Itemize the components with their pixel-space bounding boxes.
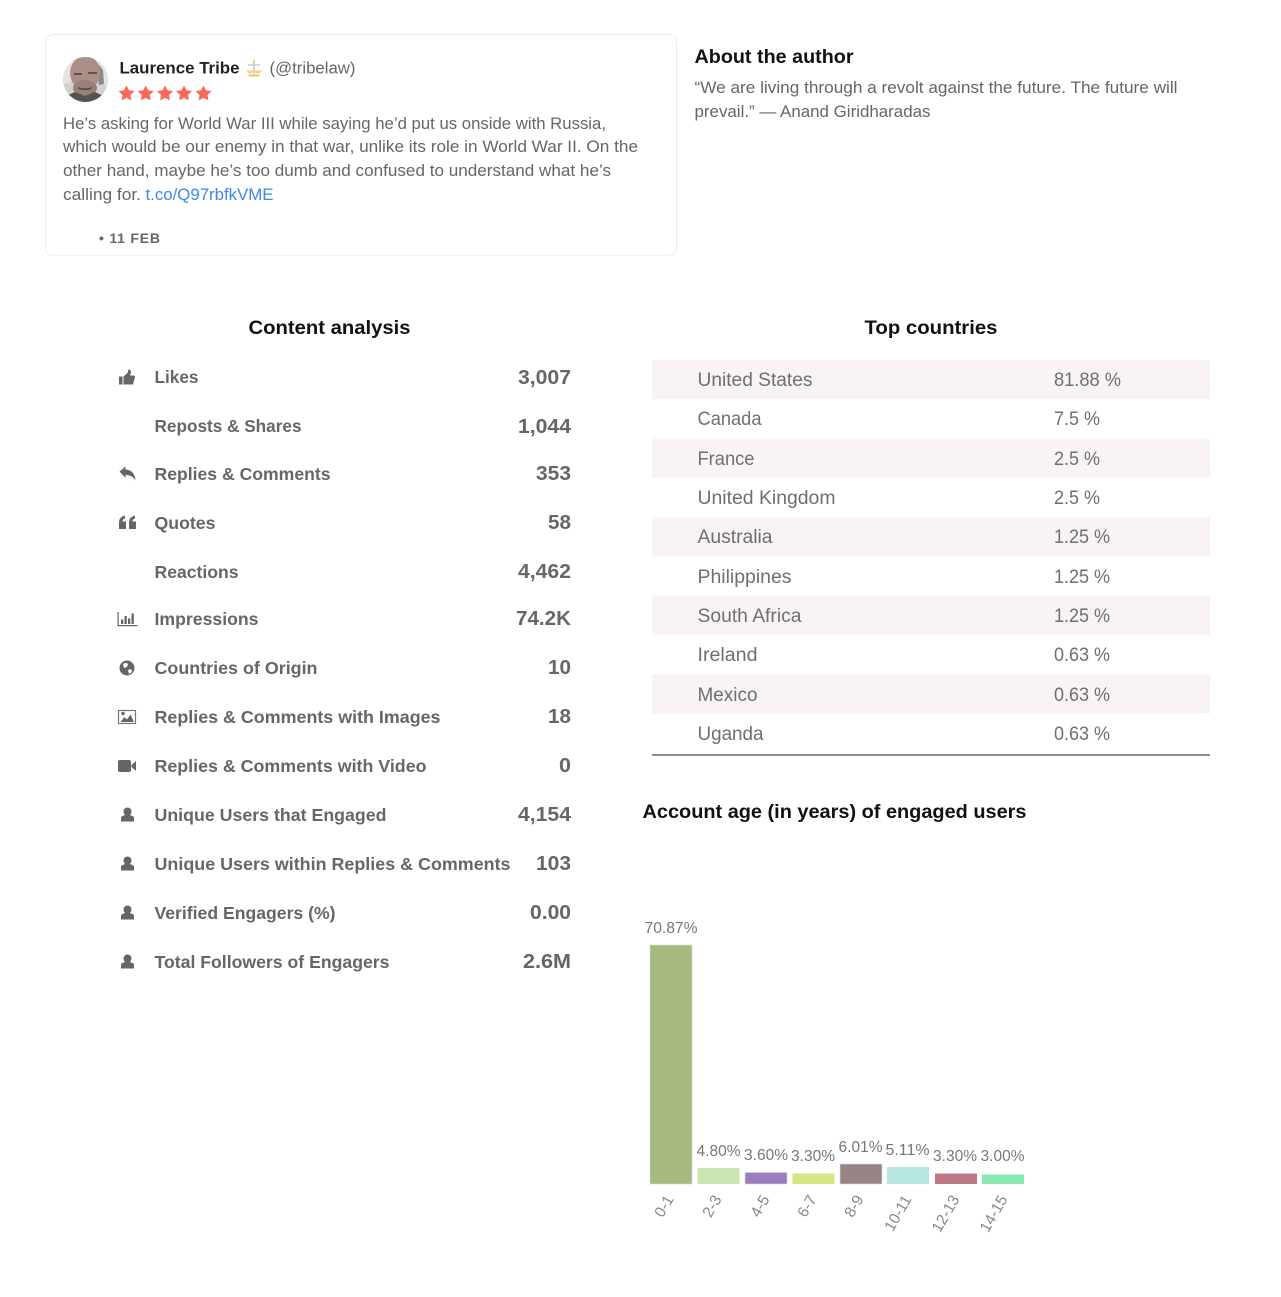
row: reposts and shares: 1,044 <box>518 415 572 438</box>
table: top countries: United Kingdom <box>698 488 836 509</box>
rating stars <box>118 86 212 100</box>
icon: author avatar <box>63 56 108 102</box>
row: replies with video: Replies & Comments with Video <box>154 756 426 776</box>
icon: user <box>121 856 134 870</box>
row: quotes <box>119 511 571 534</box>
table: top countries: Mexico <box>698 685 758 706</box>
icon: user <box>121 954 134 968</box>
tweet text: which would be our enemy in that war, unlike its role in World War II. On the <box>62 137 638 156</box>
bar chart: 10-11 <box>881 1192 915 1234</box>
table: top countries: Canada <box>698 409 762 430</box>
heading: account age: Account age (in years) of engaged users <box>642 802 1026 823</box>
row: reposts and shares <box>154 415 572 438</box>
bar chart: 3.30% <box>933 1148 977 1165</box>
table: top countries: South Africa <box>698 606 802 627</box>
panel: about the author <box>694 47 1178 121</box>
icon: picture <box>118 710 136 724</box>
row: verified engagers <box>121 901 571 924</box>
panel: account age chart <box>642 802 1026 1235</box>
row: impressions: 74.2K <box>516 607 571 630</box>
row: replies with video <box>118 754 571 777</box>
table: top countries: Uganda <box>698 724 764 745</box>
author handle: (@tribelaw) <box>270 58 356 78</box>
table: top countries: Ireland <box>698 645 758 666</box>
bar chart <box>644 920 1024 1235</box>
icon: balance scale <box>246 60 262 76</box>
bar chart: 0-1 <box>652 1192 677 1220</box>
tweet date: • 11 FEB <box>99 230 160 246</box>
row: countries of origin: 10 <box>548 656 571 679</box>
author quote: prevail.” — Anand Giridharadas <box>694 102 930 121</box>
bar chart: 6-7 <box>795 1192 820 1220</box>
table: top countries: 7.5 % <box>1054 409 1100 430</box>
row: replies with images <box>118 705 571 728</box>
row: likes <box>119 366 571 389</box>
row: reposts and shares: Reposts & Shares <box>154 416 302 436</box>
row: countries of origin <box>120 656 571 679</box>
author quote <box>694 78 1178 121</box>
bar chart: 14-15 <box>977 1192 1011 1235</box>
icon: thumbs up <box>119 370 135 384</box>
row: reactions: Reactions <box>154 562 239 582</box>
table: top countries: Philippines <box>698 567 792 588</box>
panel: tweet card <box>46 34 676 255</box>
bar chart: 3.30% <box>791 1148 835 1165</box>
table: top countries: 0.63 % <box>1054 685 1110 706</box>
table: top countries: 1.25 % <box>1054 606 1110 627</box>
table: top countries: France <box>698 449 754 470</box>
heading: top countries: Top countries <box>864 318 998 339</box>
row: replies with video: 0 <box>559 754 571 777</box>
tweet text: He’s asking for World War III while saying he’d put us onside with Russia, <box>63 114 606 133</box>
row: reactions: 4,462 <box>518 560 571 583</box>
row: reactions <box>154 560 571 583</box>
table: top countries: 0.63 % <box>1054 724 1110 745</box>
row: unique users in replies: Unique Users within Replies & Comments <box>154 854 511 874</box>
heading: about the author: About the author <box>694 47 854 68</box>
row: countries of origin: Countries of Origin <box>154 658 318 678</box>
icon: user <box>121 906 134 920</box>
tweet text <box>62 114 638 204</box>
row: replies with images: 18 <box>548 705 571 728</box>
tweet text: calling for. <box>63 185 141 204</box>
row: replies and comments <box>120 462 571 485</box>
table: top countries: 1.25 % <box>1054 567 1110 588</box>
row: impressions <box>118 607 571 630</box>
bar chart: 70.87% <box>644 920 698 937</box>
table: top countries: 81.88 % <box>1054 370 1121 391</box>
row: verified engagers: 0.00 <box>530 901 571 924</box>
icon: video camera <box>118 760 136 772</box>
icon: user <box>121 808 134 822</box>
bar chart: 6.01% <box>838 1139 882 1156</box>
author quote: “We are living through a revolt against the future. The future will <box>694 78 1178 97</box>
bar chart: 8-9 <box>842 1192 867 1220</box>
bar chart: 4.80% <box>696 1143 740 1160</box>
tweet text: other hand, maybe he’s too dumb and confused to understand what he’s <box>63 161 611 180</box>
row: unique users in replies <box>121 852 571 875</box>
heading: content analysis: Content analysis <box>248 318 410 339</box>
row: unique users in replies: 103 <box>536 852 571 875</box>
row: unique users engaged: 4,154 <box>518 803 572 826</box>
row: quotes: 58 <box>548 511 571 534</box>
bar chart: 12-13 <box>929 1192 963 1235</box>
tweet text: t.co/Q97rbfkVME <box>146 185 274 204</box>
row: total followers <box>121 950 571 973</box>
table: top countries: 1.25 % <box>1054 527 1110 548</box>
table: top countries: United States <box>698 370 812 391</box>
row: quotes: Quotes <box>154 513 216 533</box>
row: verified engagers: Verified Engagers (%) <box>154 903 336 923</box>
panel: content analysis <box>118 318 572 973</box>
table: top countries: 0.63 % <box>1054 645 1110 666</box>
icon: reply arrow <box>120 466 136 480</box>
icon: globe <box>120 660 134 676</box>
row: total followers: Total Followers of Engagers <box>154 952 390 972</box>
bar chart: 4-5 <box>748 1192 773 1220</box>
panel: top countries <box>652 318 1210 756</box>
table: top countries: 2.5 % <box>1054 488 1100 509</box>
table: top countries: 2.5 % <box>1054 449 1100 470</box>
row: unique users engaged: Unique Users that Engaged <box>154 805 386 825</box>
row: total followers: 2.6M <box>523 950 571 973</box>
icon: bar chart <box>118 612 138 626</box>
author name: Laurence Tribe <box>120 58 240 78</box>
row: likes: Likes <box>154 367 199 387</box>
table: top countries <box>652 360 1210 756</box>
bar chart: 5.11% <box>886 1142 930 1159</box>
row: replies and comments: 353 <box>536 462 571 485</box>
table: top countries: Australia <box>698 527 773 548</box>
row: likes: 3,007 <box>518 366 571 389</box>
row: replies and comments: Replies & Comments <box>154 464 331 484</box>
row: unique users engaged <box>121 803 572 826</box>
bar chart: 3.60% <box>744 1147 788 1164</box>
bar chart: 2-3 <box>700 1192 725 1220</box>
icon: quotation marks <box>119 516 136 529</box>
bar chart: 3.00% <box>980 1148 1024 1165</box>
row: replies with images: Replies & Comments with Images <box>154 707 441 727</box>
row: impressions: Impressions <box>154 609 259 629</box>
